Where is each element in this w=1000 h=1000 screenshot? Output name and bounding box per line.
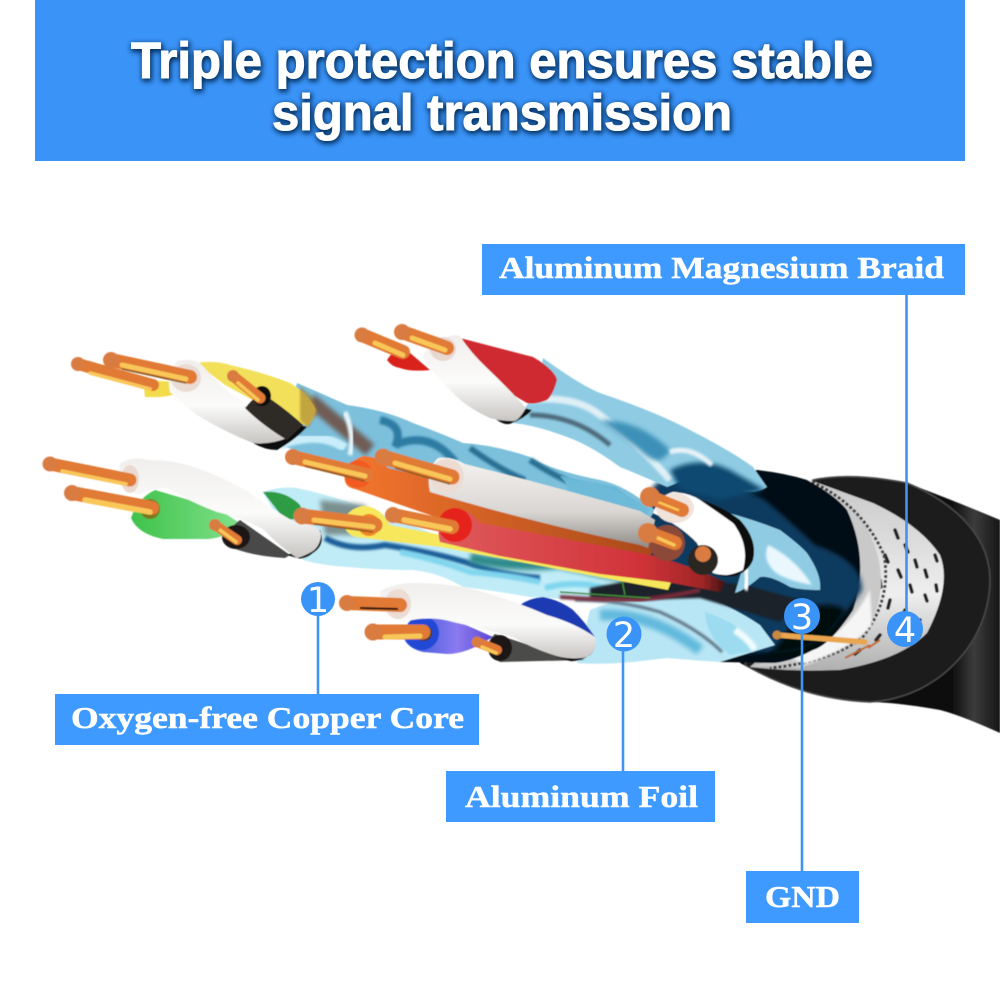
title: signal transmission — [272, 84, 732, 141]
callout: aluminum foil — [446, 616, 715, 822]
cable illustration — [42, 324, 1000, 733]
foil strand: green pair — [263, 488, 650, 600]
ground wire — [772, 630, 865, 642]
header banner: signal transmission — [273, 86, 733, 143]
wire pair: orange and white — [285, 448, 660, 557]
foil strand: red pair — [513, 358, 767, 500]
callout: aluminum magnesium braid — [482, 244, 965, 651]
callout: GND: GND — [765, 879, 840, 914]
silver foil band — [750, 480, 881, 668]
wire pair: blue — [339, 583, 596, 662]
aluminum magnesium braid — [750, 480, 944, 671]
callout: oxygen-free copper core — [55, 581, 479, 745]
callout: aluminum magnesium braid: Aluminum Magnesium Braid — [499, 250, 944, 285]
title: Triple protection ensures stable — [131, 32, 873, 89]
wire pair: right end — [638, 487, 754, 577]
foil strand: yellow pair — [280, 383, 655, 535]
header banner: Triple protection ensures stable — [132, 34, 874, 91]
wire pair: green — [42, 456, 322, 558]
foil strand: right inner — [565, 480, 820, 593]
callout: GND: 3 — [791, 598, 813, 638]
callout: GND — [746, 598, 859, 923]
black end ring — [745, 477, 990, 702]
callout: oxygen-free copper core: 1 — [307, 581, 329, 621]
wire pair: yellow and red — [294, 506, 725, 592]
header banner — [35, 0, 965, 161]
callout: aluminum magnesium braid: 4 — [894, 611, 916, 651]
dark cable opening — [640, 470, 860, 663]
central dark void — [590, 575, 800, 622]
wire pair: yellow — [71, 352, 318, 450]
wire pair: red — [354, 324, 557, 424]
callout: aluminum foil: 2 — [613, 616, 635, 656]
outer black jacket — [740, 477, 1000, 733]
foil strand: blue pair — [575, 590, 775, 664]
callout: oxygen-free copper core: Oxygen-free Copper Core — [71, 700, 464, 735]
callout: aluminum foil: Aluminum Foil — [465, 779, 698, 814]
